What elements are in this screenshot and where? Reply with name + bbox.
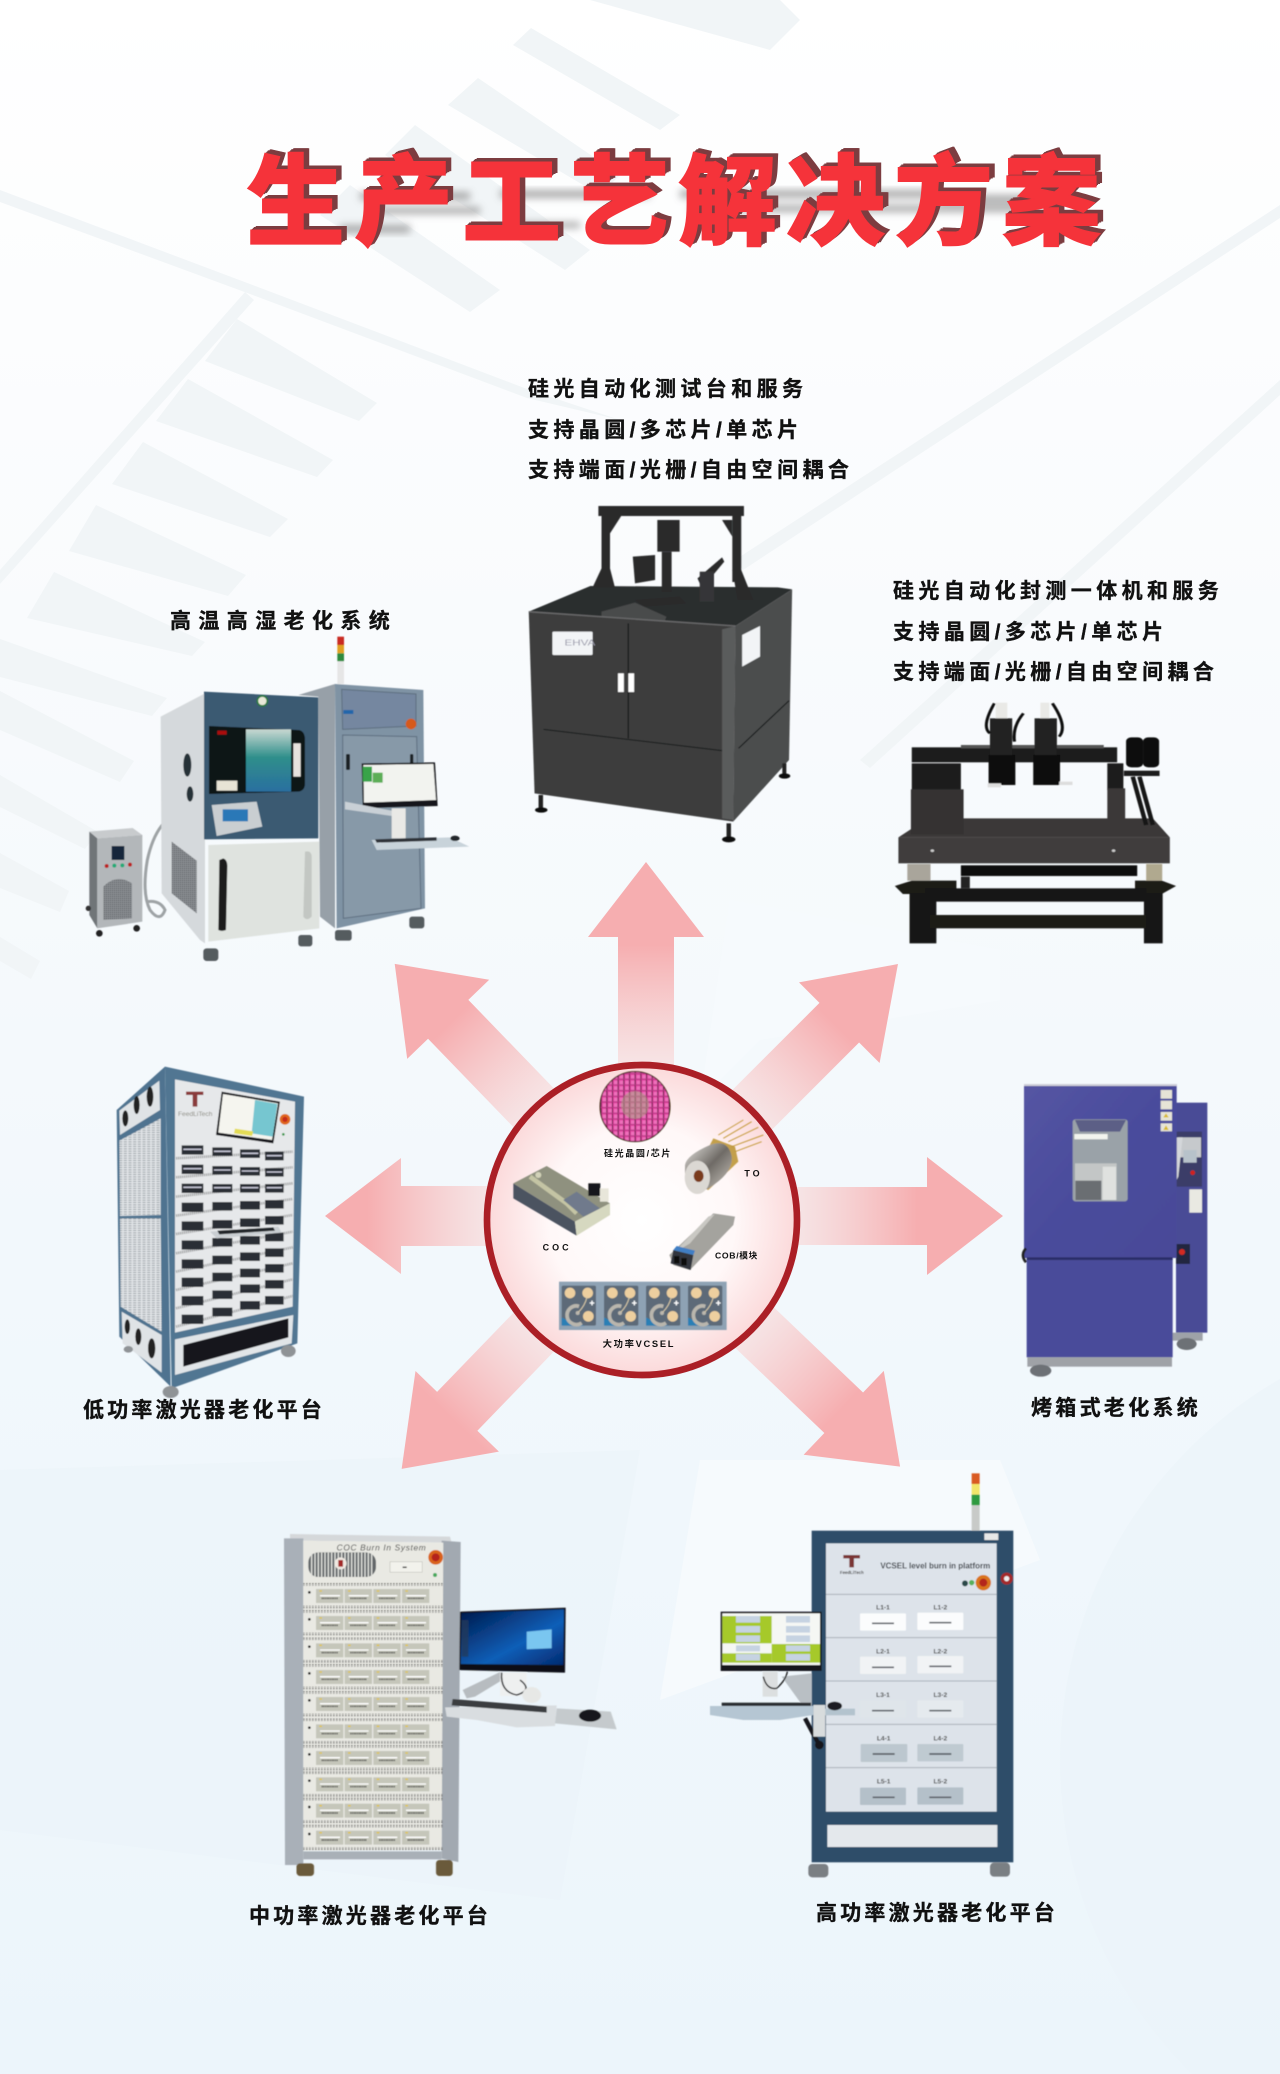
drawer labels: L1-1 [876,1605,890,1612]
label: VCSEL: 大功率VCSEL [603,1338,675,1349]
drawer labels: L5-2 [933,1779,947,1786]
central product circle [487,1065,797,1375]
keyboard tray [445,1699,617,1729]
icon: TO can [685,1120,763,1194]
casters [808,1863,1010,1877]
warning labels [1161,1090,1172,1131]
black support base [895,864,1176,943]
machine: high temperature humidity burn-in system [86,637,469,961]
chamber side [161,693,205,943]
door window [1073,1119,1128,1201]
module slots [176,1145,293,1327]
icon: high power VCSEL chips [559,1282,727,1330]
touch monitor [216,1092,280,1143]
door [1023,1084,1177,1377]
emergency stop [962,1573,1013,1590]
text block: silicon photonics test station [528,377,853,482]
drawers [860,1613,963,1805]
drawer labels: L3-1 [876,1692,890,1699]
ring [487,1065,797,1375]
casters [124,1345,296,1398]
icon: COB module [669,1213,735,1270]
hoses [145,811,185,917]
cabinet [284,1534,461,1865]
logo and heading: FeedLiTech [840,1570,864,1575]
text block: silicon photonics test station: 支持晶圆/多芯片/单芯片 [528,419,802,442]
chamber lower panel [203,842,319,961]
label: high power platform: 高功率激光器老化平台 [816,1902,1058,1925]
logo and heading [840,1555,990,1575]
machine: silicon photonics automated test station [529,506,792,842]
gantry [912,703,1160,825]
text block: silicon photonics test station: 硅光自动化测试台和服务 [528,378,807,401]
arrow: right [742,1157,1003,1275]
text block: silicon photonics packaging system [893,580,1223,684]
title: 生产工艺解决方案 [246,147,1110,258]
drawer labels [876,1605,947,1786]
label: low power platform: 低功率激光器老化平台 [83,1399,325,1422]
logo: FeedLiTech [178,1111,213,1118]
test cabinet [298,637,469,941]
text block: silicon photonics test station: 支持端面/光栅/自由空间耦合 [528,459,853,482]
desktop monitor [459,1608,566,1673]
label: humidity system: 高温高湿老化系统 [170,610,397,633]
monitor arm [463,1672,541,1703]
machine: oven burn-in system [1023,1084,1207,1377]
side unit [1172,1103,1207,1350]
casters [297,1860,453,1876]
granite table [898,763,1170,863]
label: COC: COC [543,1242,572,1252]
logo text: EHVA [564,639,595,648]
stack light [972,1473,980,1531]
machine: high power laser burn-in platform [710,1473,1013,1877]
drawer labels: L2-1 [876,1648,890,1655]
drawer labels: L4-2 [933,1735,947,1742]
emergency stop [280,1114,290,1136]
label: oven system: 烤箱式老化系统 [1031,1397,1201,1420]
drawer labels: L3-2 [933,1692,947,1699]
title drop shadow band [340,190,1060,233]
label: wafer: 硅光晶圆/芯片 [604,1148,672,1159]
text block: silicon photonics packaging system: 支持端面/光栅/自由空间耦合 [893,661,1218,684]
module rows [303,1583,443,1850]
drawer labels: L2-2 [933,1648,947,1655]
text block: silicon photonics packaging system: 支持晶圆/多芯片/单芯片 [893,621,1167,644]
probe frame [593,506,753,607]
drawer labels: L1-2 [933,1605,947,1612]
cabinet frame [812,1531,1013,1862]
chiller [86,828,142,937]
arrow: up-right [672,924,938,1190]
keyboard shelf [210,1227,282,1238]
logo [178,1092,213,1118]
side panels [117,1067,171,1387]
icon: COC [513,1166,610,1236]
logo and heading: VCSEL level burn in platform [880,1562,990,1571]
monitor arm and tray [710,1672,855,1749]
arrow: up-left [354,924,614,1188]
cabinet body [529,586,792,842]
chamber door [204,692,318,839]
icon: silicon wafer [600,1072,670,1142]
monitor [721,1612,822,1671]
panel dividers [826,1594,997,1768]
label: COB module: COB/模块 [715,1250,758,1261]
label: medium power platform: 中功率激光器老化平台 [249,1905,491,1928]
heading on panel: COC Burn In System [337,1543,426,1553]
drawer labels: L4-1 [877,1735,891,1742]
label: TO: TO [744,1169,763,1179]
arrow: down-left [360,1252,614,1509]
text block: silicon photonics packaging system: 硅光自动化封测一体机和服务 [893,580,1223,603]
arrow: down-right [674,1247,940,1509]
front frame and panel [165,1067,304,1388]
machine: low power laser burn-in platform [117,1067,304,1398]
arrow: left [325,1158,542,1274]
machine: silicon photonics automated packaging and test system [895,703,1176,943]
machine: medium power laser burn-in platform [284,1534,617,1876]
arrow: up [588,862,704,1120]
drawer labels: L5-1 [877,1779,891,1786]
